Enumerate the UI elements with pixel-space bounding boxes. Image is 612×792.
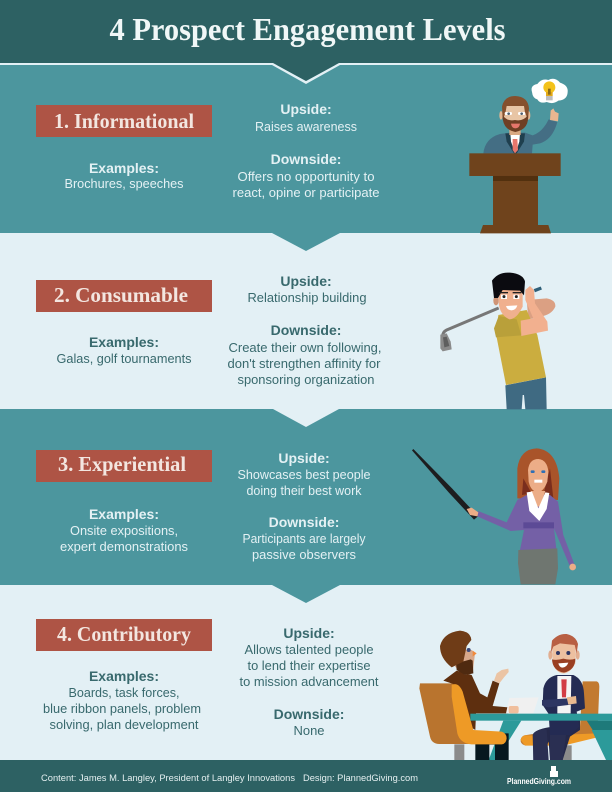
section 2 content	[36, 273, 382, 387]
left chair	[419, 683, 493, 760]
footer credits: Content: James M. Langley, President of Langley Innovations	[41, 773, 295, 783]
text: upside: Showcases best people	[238, 467, 370, 482]
text: examples: Brochures, speeches	[64, 176, 184, 191]
text: examples: Examples:	[89, 334, 159, 350]
table and tablet	[470, 697, 612, 760]
heading badge: 4. Contributory: 4. Contributory	[57, 622, 191, 646]
text: downside: react, opine or participate	[232, 185, 380, 200]
pointer stick	[412, 449, 478, 520]
text: downside: Offers no opportunity to	[238, 169, 374, 184]
text: upside: doing their best work	[246, 483, 362, 498]
text: upside: to mission advancement	[240, 674, 379, 689]
text: upside	[240, 625, 379, 689]
text: upside: Upside:	[278, 450, 330, 466]
text: downside: Participants are largely	[242, 531, 366, 546]
golfer figure	[492, 273, 555, 409]
text: examples	[43, 668, 201, 732]
arrow: section 2 to 3	[273, 409, 339, 427]
text: examples	[56, 334, 192, 366]
text: downside	[232, 151, 380, 200]
text: downside: Downside:	[274, 706, 344, 722]
text: upside: Allows talented people	[244, 642, 374, 657]
illustration: speaker at podium	[469, 79, 568, 233]
footer credits	[41, 773, 418, 783]
illustration: golfer	[440, 273, 555, 409]
heading badge: 2. Consumable: 2. Consumable	[54, 283, 188, 307]
text: downside: Downside:	[269, 514, 339, 530]
text: upside: Raises awareness	[255, 119, 357, 134]
section 1 content	[36, 101, 380, 200]
arrow: section 3 to 4	[272, 585, 340, 603]
icon: thought cloud with light bulb	[532, 79, 568, 103]
text: downside: None	[294, 723, 324, 738]
text: downside: sponsoring organization	[238, 372, 374, 387]
text: examples: solving, plan development	[50, 717, 199, 732]
arrow: section 1 to 2	[272, 233, 340, 251]
text: examples: blue ribbon panels, problem	[43, 701, 201, 716]
heading badge: 1. Informational	[36, 105, 212, 137]
text: examples	[64, 160, 184, 191]
panel: 3 experiential background	[0, 409, 612, 585]
golf club	[440, 288, 541, 351]
man body	[483, 96, 559, 153]
panel: 1 informational background	[0, 65, 612, 233]
presenter figure	[467, 448, 576, 584]
text: downside: don't strengthen affinity for	[228, 356, 381, 371]
text: upside	[238, 450, 370, 498]
text: examples: Onsite expositions,	[70, 523, 178, 538]
heading badge: 1. Informational: 1. Informational	[54, 109, 194, 133]
footer band	[0, 760, 612, 792]
heading badge: 3. Experiential	[36, 450, 212, 482]
footer credits: Design: PlannedGiving.com	[303, 773, 418, 783]
text: downside: Downside:	[271, 151, 341, 167]
text: downside: passive observers	[252, 547, 356, 562]
header band with arrow	[0, 0, 612, 84]
right chair	[521, 681, 599, 760]
text: downside	[274, 706, 344, 738]
heading badge: 2. Consumable	[36, 280, 212, 312]
panel: 4 contributory background	[0, 585, 612, 760]
logo: PlannedGiving.com	[507, 766, 571, 786]
text: examples: Galas, golf tournaments	[56, 351, 192, 366]
text: downside: Create their own following,	[228, 340, 382, 355]
text: upside: Upside:	[280, 273, 332, 289]
text: upside	[248, 273, 366, 305]
illustration: two people meeting at a table	[419, 631, 612, 760]
text: upside: Upside:	[280, 101, 332, 117]
text: upside	[255, 101, 357, 134]
logo: PlannedGiving.com: PlannedGiving.com	[507, 776, 571, 786]
text: examples: expert demonstrations	[60, 539, 188, 554]
section 3 content	[36, 450, 370, 562]
text: downside	[228, 322, 382, 387]
text: upside: Relationship building	[248, 290, 366, 305]
text: examples: Examples:	[89, 668, 159, 684]
text: examples: Examples:	[89, 506, 159, 522]
text: downside: Downside:	[271, 322, 341, 338]
left table leg	[489, 721, 521, 760]
illustration: presenter with pointer	[412, 448, 576, 584]
text: upside: Upside:	[283, 625, 335, 641]
text: downside	[242, 514, 366, 562]
heading badge: 4. Contributory	[36, 619, 212, 651]
text: examples	[60, 506, 188, 554]
right man	[533, 634, 585, 760]
left man	[440, 631, 509, 760]
text: examples: Boards, task forces,	[68, 685, 180, 700]
text: upside: to lend their expertise	[248, 658, 370, 673]
title: 4 Prospect Engagement Levels	[110, 11, 506, 47]
panel: 2 consumable background	[0, 233, 612, 409]
text: examples: Examples:	[89, 160, 159, 176]
podium	[469, 153, 561, 233]
section 4 content	[36, 619, 379, 738]
heading badge: 3. Experiential: 3. Experiential	[58, 452, 186, 476]
